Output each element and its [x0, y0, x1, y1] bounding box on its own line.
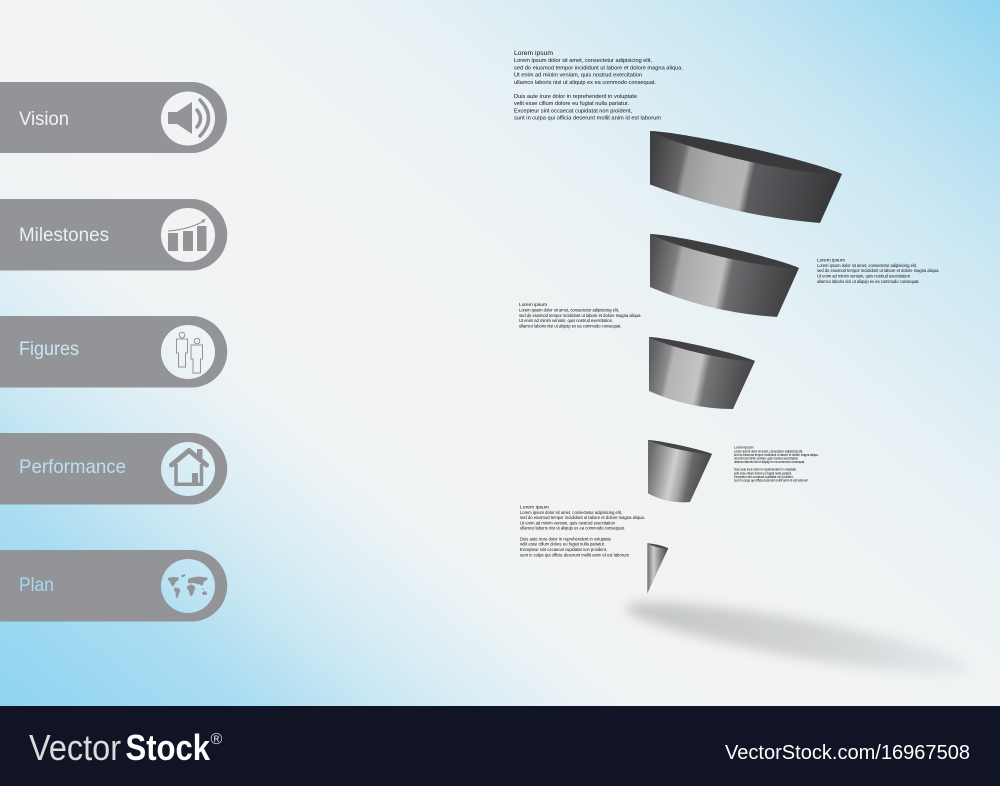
text block: top: Ut enim ad minim veniam, quis nostrud exercitation	[514, 73, 642, 79]
menu panel: Vision	[0, 82, 227, 153]
text block: right lower: ullamco laboris nisi ut aliquip ex ea commodo consequat.	[734, 460, 805, 464]
text block: right lower: Lorem ipsum	[734, 446, 754, 450]
text block: right lower: Lorem ipsum dolor sit amet, consectetur adipisicing elit,	[734, 449, 803, 453]
menu panel: Performance	[0, 433, 227, 504]
text block: right upper: Lorem ipsum dolor sit amet, consectetur adipisicing elit,	[817, 263, 917, 268]
icon: speaker	[168, 100, 208, 136]
text block: right upper: Ut enim ad minim veniam, quis nostrud exercitation	[817, 274, 911, 278]
text block: right lower: sed do eiusmod tempor incididunt ut labore et dolore magna aliqua.	[734, 453, 819, 457]
text block: left lower: sunt in culpa qui officia deserunt mollit anim id est laborum	[520, 552, 629, 557]
logo: VectorStock: Vector	[29, 727, 121, 768]
text block: left lower: ullamco laboris nisi ut aliquip ex ea commodo consequat.	[520, 526, 625, 531]
icon: world map	[168, 574, 208, 598]
text block: left lower: velit esse cillum dolore eu fugiat nulla pariatur.	[520, 542, 605, 547]
text block: left middle: Ut enim ad minim veniam, quis nostrud exercitation	[519, 318, 613, 323]
text block: right lower: velit esse cillum dolore eu fugiat nulla pariatur.	[734, 471, 792, 475]
icon: two people	[176, 332, 202, 373]
cone slice 2	[650, 234, 799, 317]
cone slice 4	[648, 440, 712, 502]
logo: VectorStock: Stock	[126, 727, 211, 768]
text block: left middle: sed do eiusmod tempor incididunt ut labore et dolore magna aliqua.	[519, 313, 642, 318]
text block: left middle: Lorem ipsum	[519, 302, 547, 307]
text block: right upper: sed do eiusmod tempor incididunt ut labore et dolore magna aliqua.	[817, 268, 940, 273]
text block: top	[514, 51, 683, 122]
cone tip	[647, 543, 668, 594]
text block: right lower: Duis aute irure dolor in reprehenderit in voluptate	[734, 468, 796, 472]
text block: left lower: Ut enim ad minim veniam, quis nostrud exercitation	[520, 520, 616, 525]
text block: top: Excepteur sint occaecat cupidatat non proident,	[514, 108, 632, 114]
pill: Milestones	[0, 199, 227, 270]
pill: Plan	[0, 550, 227, 622]
footer bar	[0, 706, 1000, 786]
pill: Figures	[0, 316, 227, 388]
label: Vision: Vision	[19, 108, 69, 130]
image id: VectorStock.com/16967508	[725, 742, 970, 764]
text block: left lower: Excepteur sint occaecat cupidatat non proident,	[520, 547, 607, 552]
text block: right upper: Lorem ipsum	[817, 258, 845, 262]
text block: left lower: sed do eiusmod tempor incididunt ut labore et dolore magna aliqua.	[520, 515, 645, 520]
floor shadow	[622, 589, 974, 687]
text block: left lower: Lorem ipsum	[520, 504, 549, 510]
icon: house	[172, 449, 206, 484]
cone slice 1	[650, 131, 842, 223]
label: Plan: Plan	[19, 574, 54, 596]
text block: left lower: Duis aute irure dolor in reprehenderit in voluptate	[520, 536, 612, 541]
text block: left lower: Lorem ipsum dolor sit amet, consectetur adipisicing elit,	[520, 510, 622, 515]
pill: Performance	[0, 433, 227, 504]
text block: left middle	[519, 302, 642, 328]
text block: top: Lorem ipsum dolor sit amet, consectetur adipisicing elit,	[514, 58, 652, 64]
logo: VectorStock: ®	[210, 731, 222, 748]
text block: right upper	[817, 258, 940, 284]
text block: right lower	[734, 446, 819, 482]
menu panel: Plan	[0, 550, 227, 622]
text block: right lower: Excepteur sint occaecat cupidatat non proident,	[734, 475, 794, 479]
text block: top: velit esse cillum dolore eu fugiat nulla pariatur.	[514, 101, 629, 107]
pill: Vision	[0, 82, 227, 153]
text block: top: sed do eiusmod tempor incididunt ut labore et dolore magna aliqua.	[514, 65, 683, 71]
text block: top: Lorem ipsum	[514, 51, 553, 57]
text block: left middle: ullamco laboris nisi ut aliquip ex ea commodo consequat.	[519, 323, 622, 328]
text block: top: sunt in culpa qui officia deserunt mollit anim id est laborum	[514, 116, 661, 122]
text block: left lower	[520, 504, 645, 557]
text block: right lower: sunt in culpa qui officia deserunt mollit anim id est laborum	[734, 478, 808, 482]
cone slice 3	[649, 337, 755, 409]
text block: top: ullamco laboris nisi ut aliquip ex ea commodo consequat.	[514, 80, 656, 86]
text block: top: Duis aute irure dolor in reprehenderit in voluptate	[514, 94, 637, 100]
label: Milestones: Milestones	[19, 224, 109, 246]
icon: bar chart	[168, 218, 206, 251]
label: Performance: Performance	[19, 456, 126, 478]
text block: left middle: Lorem ipsum dolor sit amet, consectetur adipisicing elit,	[519, 308, 619, 312]
logo: VectorStock	[29, 727, 222, 768]
text block: right upper: ullamco laboris nisi ut aliquip ex ea commodo consequat.	[817, 279, 920, 284]
text block: right lower: Ut enim ad minim veniam, quis nostrud exercitation	[734, 456, 798, 460]
label: Figures: Figures	[19, 338, 79, 360]
menu panel: Figures	[0, 316, 227, 388]
menu panel: Milestones	[0, 199, 227, 270]
